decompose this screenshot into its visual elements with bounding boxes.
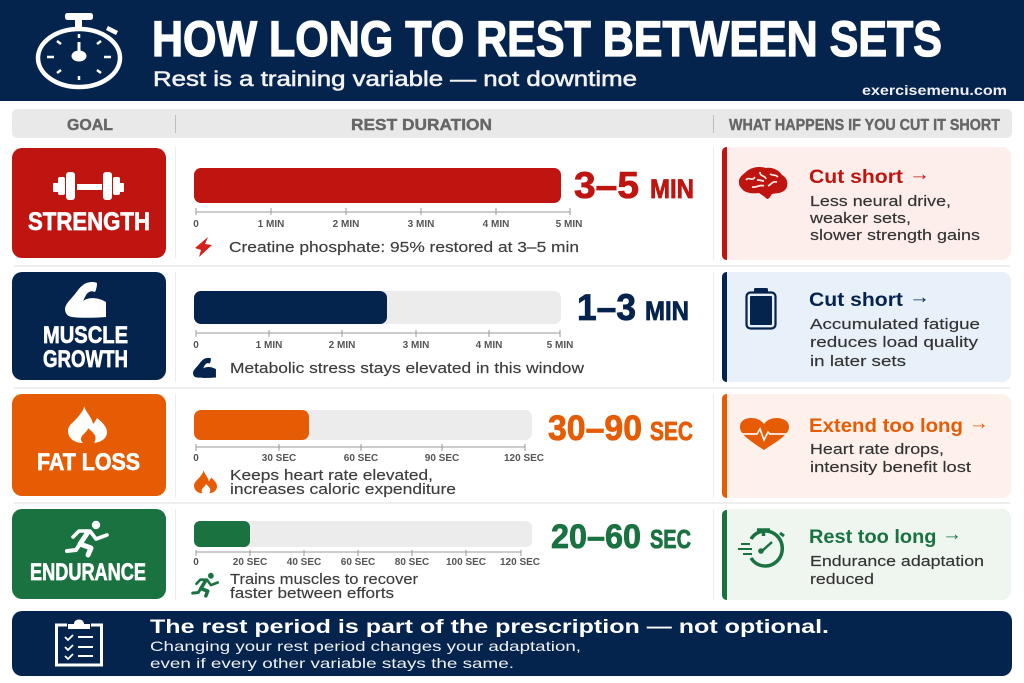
card: endurance (12, 509, 166, 599)
bar chart: 30-90 sec: 120 SEC (504, 453, 544, 464)
bar chart: 30-90 sec (193, 410, 544, 464)
text: Heart rate drops, (810, 442, 944, 458)
label: STRENGTH (28, 208, 150, 236)
column header bar (12, 109, 1012, 138)
heading: → (909, 164, 930, 185)
icon: bolt (195, 237, 212, 257)
note (230, 468, 456, 498)
heading: Cut short (809, 167, 893, 188)
value: 3–5 (574, 165, 639, 206)
icon: speed stopwatch (738, 530, 784, 566)
card: strength (12, 148, 166, 258)
icon: small flame (194, 470, 217, 493)
icon: battery (746, 288, 776, 328)
bar chart: 30-90 sec: 30 SEC (262, 453, 296, 464)
heading: Cut short (809, 290, 893, 311)
value: MIN (650, 174, 694, 204)
value (551, 518, 691, 556)
bar chart: 1-3 min: 0 (193, 340, 199, 351)
text: Endurance adaptation (810, 554, 984, 570)
bar chart: 1-3 min: 1 MIN (256, 340, 282, 351)
value: SEC (650, 416, 693, 446)
icon: brain (739, 167, 787, 199)
icon: small runner (193, 573, 218, 596)
card: muscle growth (12, 272, 166, 380)
bar chart: 20-60 sec: 120 SEC (500, 557, 540, 568)
bar chart: 3-5 min: 4 MIN (483, 219, 509, 230)
header banner (0, 0, 1024, 101)
footer text: Changing your rest period changes your adaptation, (150, 638, 581, 654)
note (230, 572, 418, 602)
bar chart: 3-5 min (193, 168, 582, 230)
bar chart: 1-3 min (193, 291, 573, 351)
bar chart: 3-5 min: 1 MIN (258, 219, 284, 230)
text: reduces load quality (810, 335, 979, 351)
text (810, 442, 971, 476)
bar chart: 1-3 min: 3 MIN (403, 340, 429, 351)
column: what happens: WHAT HAPPENS IF YOU CUT IT SHORT (729, 117, 1000, 134)
label: MUSCLE (43, 322, 128, 349)
column: goal: GOAL (67, 117, 113, 134)
website: exercisemenu.com (862, 82, 1007, 98)
note: Keeps heart rate elevated, (230, 468, 433, 484)
text: in later sets (810, 354, 906, 370)
value: 30–90 (548, 409, 642, 448)
icon: stopwatch (38, 13, 120, 87)
text: Accumulated fatigue (810, 317, 980, 333)
icon: runner (67, 521, 107, 555)
text: reduced (810, 572, 874, 588)
bar chart: 1-3 min: 2 MIN (329, 340, 355, 351)
footer banner (12, 611, 1012, 676)
panel: cut short (722, 272, 1011, 382)
row: strength (12, 147, 1011, 260)
bar chart: 30-90 sec: 60 SEC (344, 453, 378, 464)
icon: flexed arm (65, 282, 106, 318)
footer heading: The rest period is part of the prescription — not optional. (150, 617, 829, 638)
value: 20–60 (551, 518, 641, 556)
bar chart: 20-60 sec: 60 SEC (341, 557, 375, 568)
bar chart: 1-3 min: 5 MIN (547, 340, 573, 351)
note: Metabolic stress stays elevated in this window (230, 361, 585, 377)
text (809, 194, 980, 244)
icon: clipboard (56, 620, 102, 665)
bar chart: 3-5 min: 0 (193, 219, 199, 230)
bar chart: 1-3 min: 4 MIN (476, 340, 502, 351)
footer text: even if every other variable stays the same. (150, 655, 514, 671)
note: faster between efforts (230, 586, 394, 602)
row: muscle growth (12, 272, 1011, 382)
text: slower strength gains (810, 228, 980, 244)
bar chart: 20-60 sec: 0 (193, 557, 199, 568)
value (577, 287, 689, 328)
panel: extend too long (722, 394, 1011, 498)
bar chart: 30-90 sec: 0 (193, 453, 199, 464)
note: Creatine phosphate: 95% restored at 3–5 min (229, 240, 579, 256)
panel: cut short (722, 147, 1011, 260)
subtitle: Rest is a training variable — not downtime (153, 68, 637, 91)
icon: dumbbell (53, 172, 124, 200)
bar chart: 30-90 sec: 90 SEC (425, 453, 459, 464)
bar chart: 20-60 sec: 40 SEC (287, 557, 321, 568)
note: increases caloric expenditure (230, 482, 456, 498)
icon: small arm (193, 358, 216, 378)
value (574, 165, 694, 206)
heading: → (909, 287, 930, 308)
heading: → (969, 413, 989, 434)
bar chart: 20-60 sec: 80 SEC (395, 557, 429, 568)
text: weaker sets, (809, 211, 911, 227)
text: intensity benefit lost (810, 460, 971, 476)
icon: flame (68, 406, 107, 443)
value: 1–3 (577, 287, 636, 328)
bar chart: 20-60 sec: 100 SEC (446, 557, 486, 568)
heading: Extend too long (809, 416, 953, 437)
value: SEC (650, 524, 691, 554)
panel: rest too long (722, 509, 1011, 600)
label: GROWTH (43, 346, 128, 373)
bar chart: 3-5 min: 2 MIN (333, 219, 359, 230)
text: Less neural drive, (810, 194, 951, 210)
note: Trains muscles to recover (230, 572, 418, 588)
icon: heart (740, 418, 789, 450)
label (43, 322, 128, 373)
bar chart: 3-5 min: 5 MIN (556, 219, 582, 230)
column: rest duration: REST DURATION (351, 117, 492, 134)
card: fat loss (12, 394, 166, 496)
value: MIN (645, 296, 689, 326)
value (548, 409, 693, 448)
bar chart: 3-5 min: 3 MIN (408, 219, 434, 230)
text (810, 317, 980, 370)
label: FAT LOSS (37, 449, 140, 476)
heading: Rest too long (809, 527, 930, 548)
footer text (150, 638, 581, 671)
bar chart: 20-60 sec (193, 521, 540, 568)
bar chart: 20-60 sec: 20 SEC (233, 557, 267, 568)
text (810, 554, 984, 588)
heading: → (942, 524, 962, 545)
row: fat loss (12, 394, 1011, 498)
row: endurance (12, 509, 1011, 602)
label: ENDURANCE (30, 559, 146, 586)
